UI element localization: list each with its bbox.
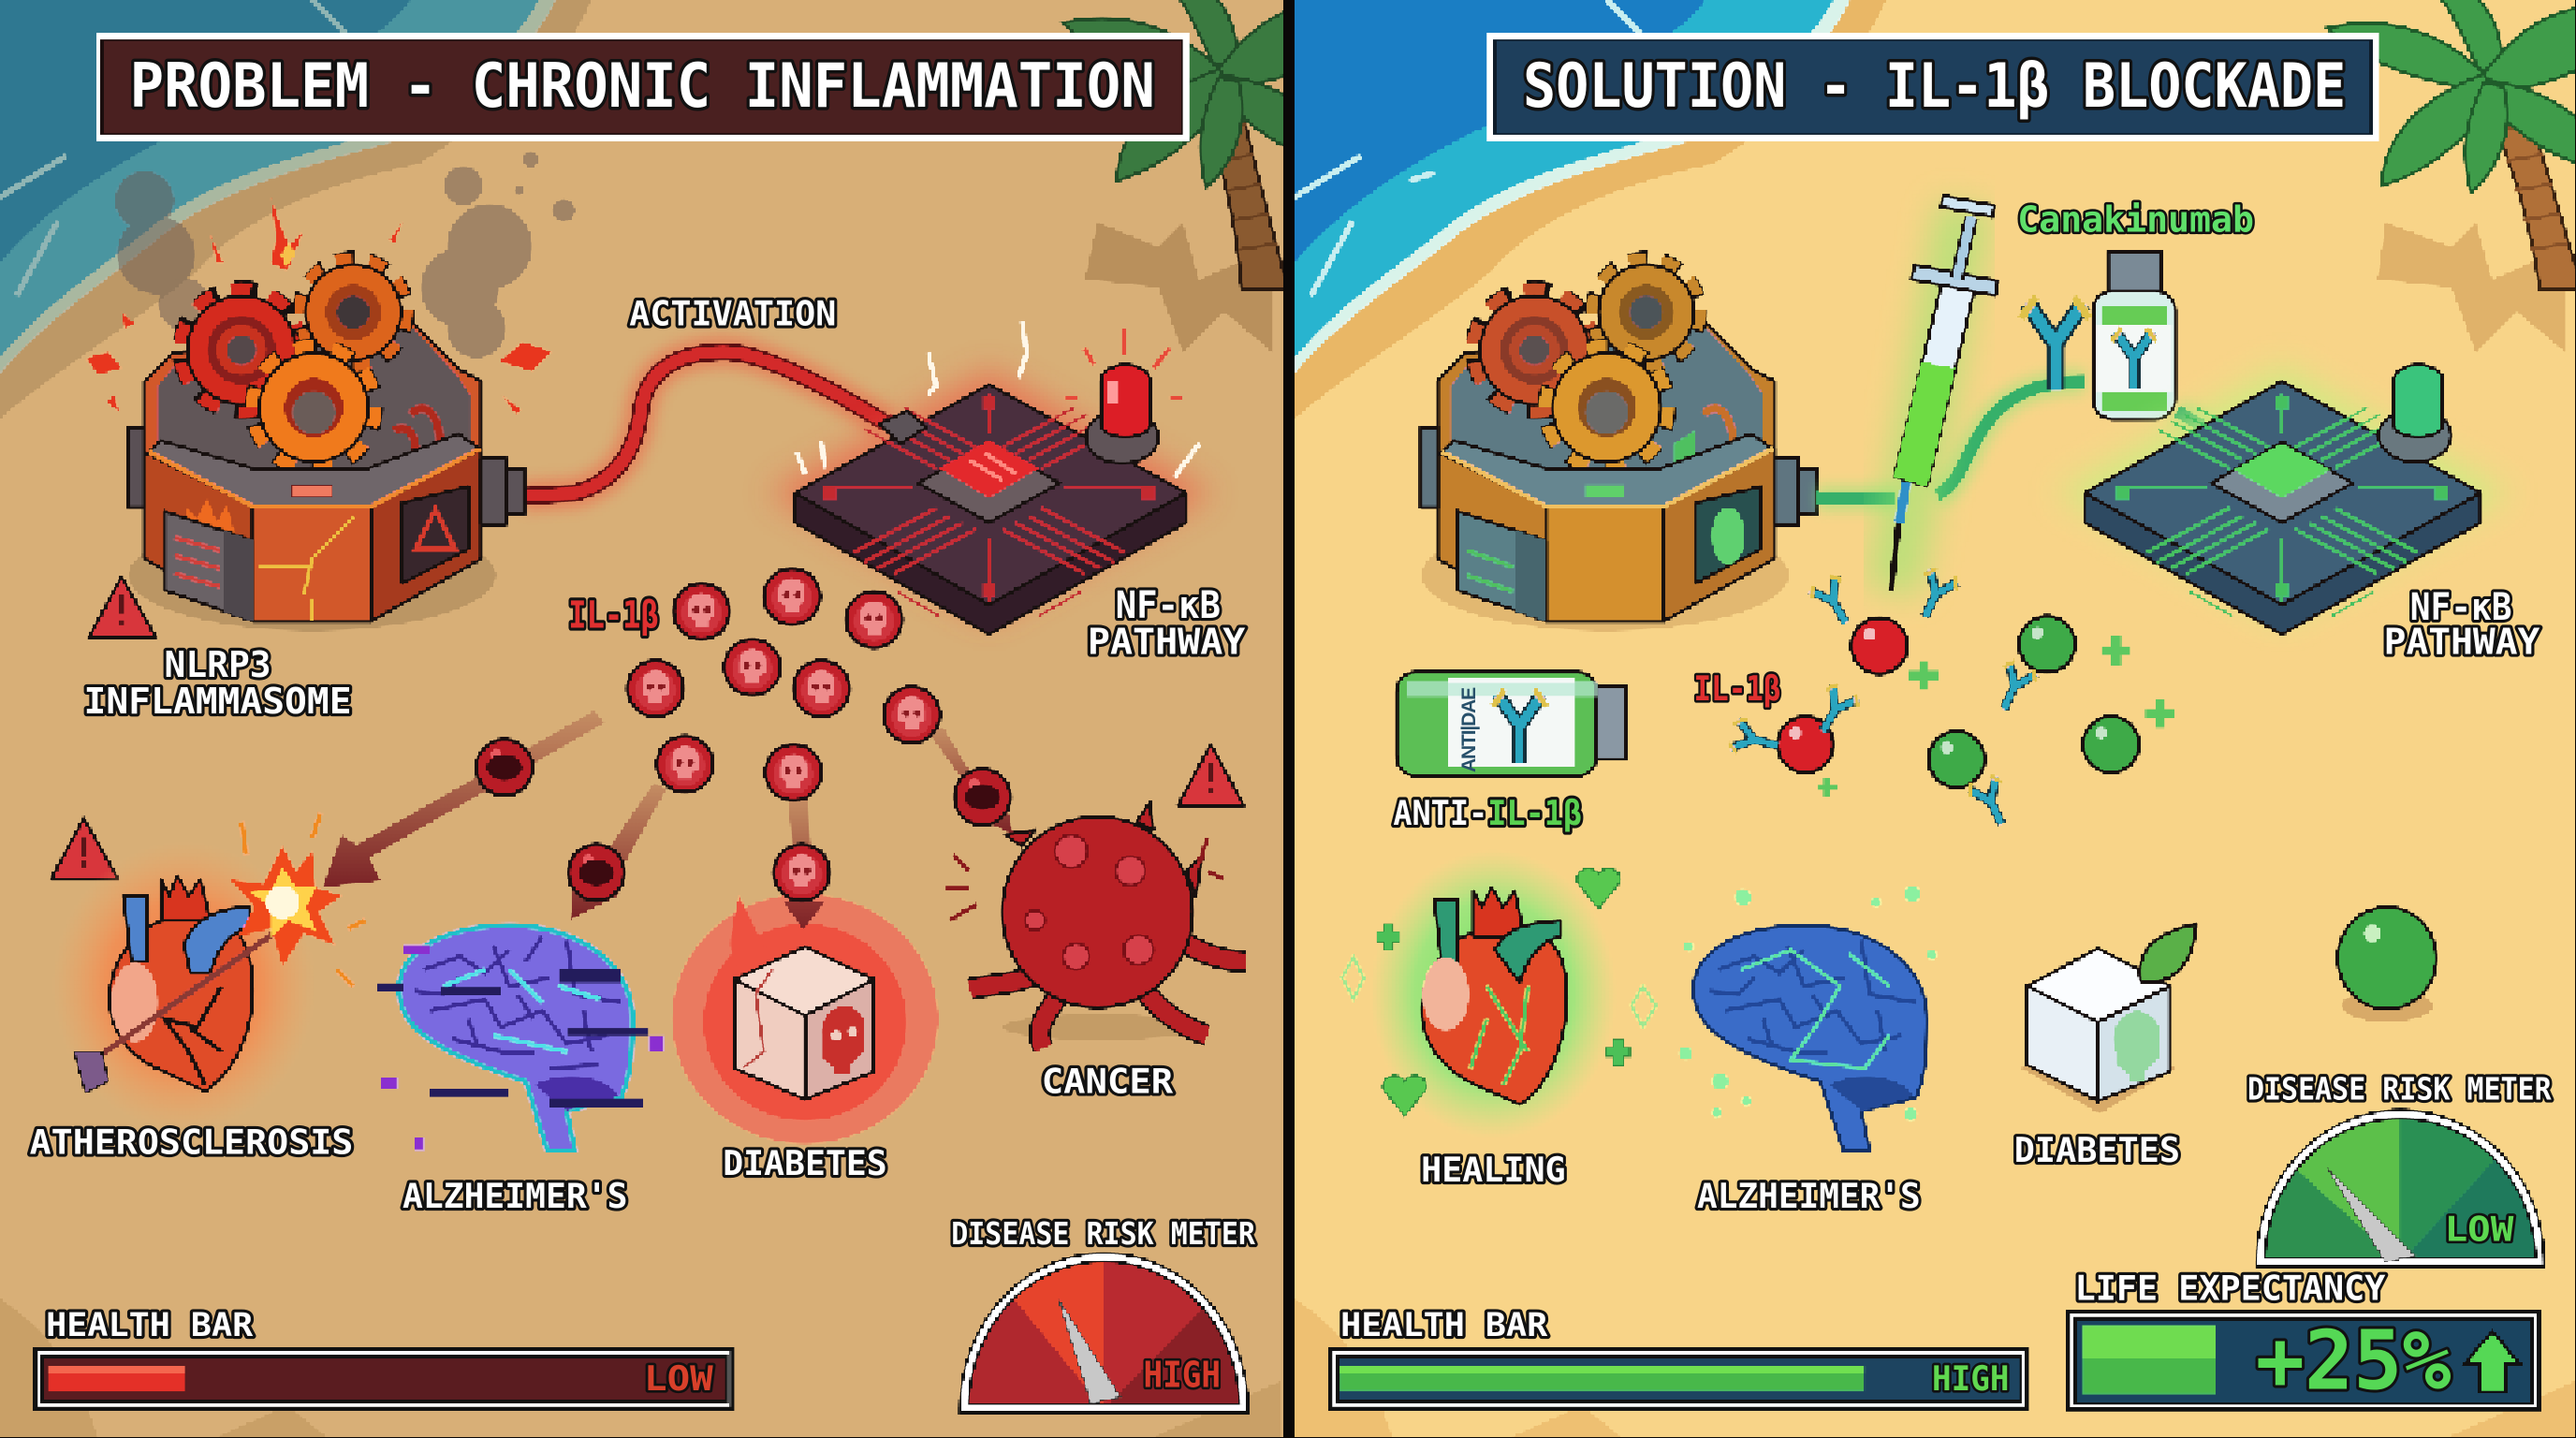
title bar: problem <box>98 37 1186 138</box>
health bar high <box>1331 1349 2027 1408</box>
title: solution: SOLUTION - IL-1β BLOCKADE <box>1523 51 2346 122</box>
label: life expectancy: LIFE EXPECTANCY <box>2075 1269 2386 1309</box>
healthy brain <box>1693 925 1927 1151</box>
palm tree <box>2328 0 2576 353</box>
label: NLRP3 inflammasome: NLRP3 <box>165 644 271 686</box>
IL-1 beta skull particles <box>476 568 1010 901</box>
vial with antibody <box>2093 252 2175 419</box>
label: health bar: HEALTH BAR <box>1340 1306 1548 1344</box>
arrows to diseases <box>322 710 1014 931</box>
panel: problem - chronic inflammation <box>0 0 1358 1438</box>
warning triangle: heart <box>51 818 118 879</box>
label: atherosclerosis: ATHEROSCLEROSIS <box>30 1122 353 1162</box>
flames and sparks <box>85 198 552 414</box>
disease: cancer cell <box>944 802 1245 1049</box>
neutralised IL-1 beta and antibodies <box>1726 565 2175 832</box>
gear: orange back <box>300 259 406 365</box>
label: NF-kB pathway <box>2384 585 2540 664</box>
sand background <box>0 0 1283 1438</box>
label: canakinumab: Canakinumab <box>2017 199 2254 242</box>
disease: sugar cube on fire <box>672 894 938 1144</box>
label: NLRP3 inflammasome <box>84 644 352 723</box>
label: health bar: HEALTH BAR <box>46 1306 254 1344</box>
syringe <box>1891 196 1998 592</box>
NF-kB circuit board <box>795 385 1186 635</box>
label: disease risk meter: DISEASE RISK METER <box>951 1215 1256 1252</box>
disease: glitching brain <box>378 925 664 1151</box>
explosion <box>230 814 365 986</box>
gear: red <box>183 291 300 409</box>
needle <box>1058 1299 1120 1403</box>
label: diabetes: DIABETES <box>2014 1130 2180 1170</box>
label: disease risk meter: DISEASE RISK METER <box>2247 1070 2553 1107</box>
label: IL-1 beta: IL-1β <box>568 594 659 638</box>
gauge: disease risk high <box>940 1186 1321 1414</box>
gauge value: high: HIGH <box>1144 1355 1221 1397</box>
label: NF-kB pathway <box>1088 583 1246 664</box>
beach and ocean <box>0 0 1281 1438</box>
health bar low <box>37 1349 733 1408</box>
NLRP3 inflammasome machine <box>128 259 524 631</box>
clean sugar cube with leaf <box>2021 924 2197 1114</box>
label: anti-IL-1 beta: ANTI-IL-1β <box>1393 793 1582 833</box>
NF-kB board healthy <box>2085 381 2481 635</box>
label: diabetes: DIABETES <box>723 1143 887 1183</box>
green sparkle dots <box>1679 886 1937 1121</box>
beach and ocean <box>1295 0 2576 1438</box>
anti-IL-1 beta vial <box>1397 672 1627 776</box>
label: NLRP3 inflammasome: INFLAMMASOME <box>84 681 352 723</box>
smoke clouds <box>115 151 575 359</box>
up arrow <box>2465 1331 2520 1392</box>
title: problem: PROBLEM - CHRONIC INFLAMMATION <box>130 51 1155 122</box>
warning triangle: machine <box>89 577 156 638</box>
label: cancer: CANCER <box>1042 1061 1174 1101</box>
label: NF-kB pathway: NF-κB <box>1116 583 1221 627</box>
label: alzheimer's: ALZHEIMER'S <box>402 1176 627 1216</box>
gauge value: low: LOW <box>2445 1209 2514 1249</box>
gear: orange front <box>255 348 373 467</box>
machine body <box>144 452 253 622</box>
hearts and healing plus icons <box>1342 869 1656 1116</box>
label: activation: ACTIVATION <box>629 294 836 334</box>
warning triangle: cancer <box>1178 744 1244 805</box>
disease: heart with atherosclerosis <box>52 842 315 1131</box>
label: alzheimer's: ALZHEIMER'S <box>1697 1176 1921 1216</box>
needle <box>2326 1167 2415 1262</box>
status light green <box>2378 365 2452 462</box>
label: NF-kB pathway: PATHWAY <box>1088 622 1246 664</box>
palm tree <box>1059 0 1283 352</box>
NLRP3 machine calmed <box>1421 259 1817 631</box>
healed heart <box>1370 850 1617 1139</box>
label: IL-1 beta: IL-1β <box>1694 668 1781 709</box>
label: NF-kB pathway: PATHWAY <box>2384 622 2540 664</box>
large green ball <box>2338 907 2437 1022</box>
health bar value: low: LOW <box>644 1358 714 1399</box>
gauge: disease risk low <box>2193 1077 2571 1266</box>
label: NF-kB pathway: NF-κB <box>2410 585 2512 629</box>
sand background <box>1295 0 2576 1438</box>
title bar: solution <box>1490 37 2376 138</box>
label: healing: HEALING <box>1421 1150 1566 1190</box>
antibody beside vial <box>2021 297 2089 390</box>
activation wire <box>522 352 887 496</box>
electric sparks <box>797 320 1199 477</box>
vial label text: ANTI|DAE <box>1458 687 1480 772</box>
alarm light <box>1064 329 1183 463</box>
health bar value: high: HIGH <box>1932 1358 2009 1399</box>
panel: solution - IL-1 beta blockade <box>1295 0 2576 1438</box>
green wire <box>1817 381 2210 498</box>
life expectancy value: +25% <box>2256 1313 2452 1408</box>
life expectancy meter <box>2069 1312 2539 1410</box>
